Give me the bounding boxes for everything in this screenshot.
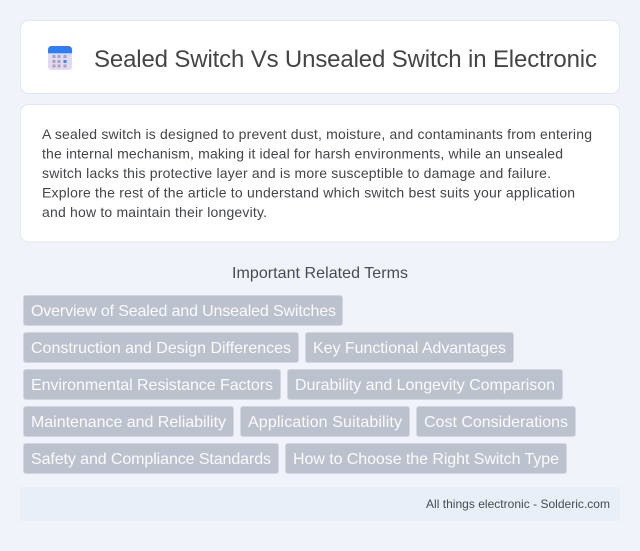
chip: choosing xyxy=(286,444,566,474)
icon: calendar xyxy=(48,46,72,70)
chip: safety xyxy=(24,444,278,474)
chip: construction xyxy=(24,332,298,362)
text block: description: Explore the rest of the article to understand which switch best suits your application xyxy=(42,184,575,200)
chip: environmental xyxy=(24,370,280,400)
chip: functional advantages: Key Functional Advantages xyxy=(313,340,506,357)
chip: application: Application Suitability xyxy=(248,414,402,431)
chip: construction: Construction and Design Differences xyxy=(31,340,291,357)
footer xyxy=(20,487,620,521)
chip: cost xyxy=(416,406,576,436)
text block: description xyxy=(42,126,592,220)
chip: maintenance: Maintenance and Reliability xyxy=(31,414,226,431)
heading: related terms: Important Related Terms xyxy=(232,265,408,282)
chip: application xyxy=(240,406,410,436)
panel: header xyxy=(20,20,620,94)
text block: description: A sealed switch is designed to prevent dust, moisture, and contaminants from entering xyxy=(42,126,592,142)
chip: choosing: How to Choose the Right Switch Type xyxy=(293,451,559,468)
text block: description: and how to maintain their longevity. xyxy=(42,204,267,220)
footer: All things electronic - Solderic.com xyxy=(426,497,610,511)
title: Sealed Switch Vs Unsealed Switch in Electronic xyxy=(94,46,597,73)
chip: cost: Cost Considerations xyxy=(424,414,568,431)
chip: overview: Overview of Sealed and Unsealed Switches xyxy=(31,303,336,320)
text block: description: switch lacks this protective layer and is more susceptible to damage and failure. xyxy=(42,165,551,181)
text block: description: the internal mechanism, making it ideal for harsh environments, while an unsealed xyxy=(42,146,563,162)
chip: maintenance xyxy=(24,406,234,436)
panel: intro text xyxy=(20,104,620,242)
panel: term chips xyxy=(24,296,576,474)
chip: safety: Safety and Compliance Standards xyxy=(31,451,271,468)
chip: durability: Durability and Longevity Comparison xyxy=(295,377,555,394)
chip: overview xyxy=(24,296,342,326)
chip: functional advantages xyxy=(306,332,514,362)
chip: environmental: Environmental Resistance Factors xyxy=(31,377,273,394)
chip: durability xyxy=(288,370,562,400)
